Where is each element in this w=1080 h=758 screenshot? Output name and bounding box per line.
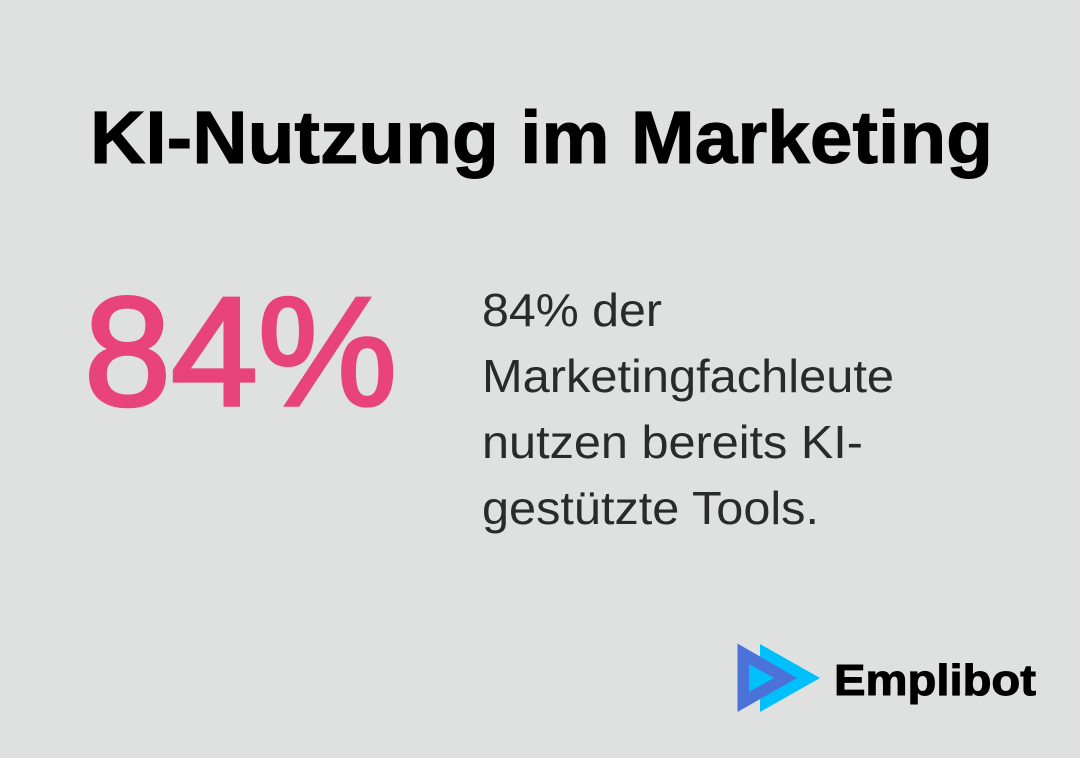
description text: 84% der (482, 284, 662, 336)
description text: gestützte Tools. (482, 482, 819, 534)
description text: Marketingfachleute (482, 350, 894, 402)
big statistic: 84%: 84% (84, 265, 397, 438)
logo wordmark: Emplibot (834, 656, 1036, 705)
description text (482, 284, 894, 534)
logo: Emplibot (738, 644, 1036, 712)
description text: nutzen bereits KI- (482, 416, 863, 468)
title: KI-Nutzung im Marketing (90, 96, 993, 179)
icon: play triangles (738, 644, 820, 712)
